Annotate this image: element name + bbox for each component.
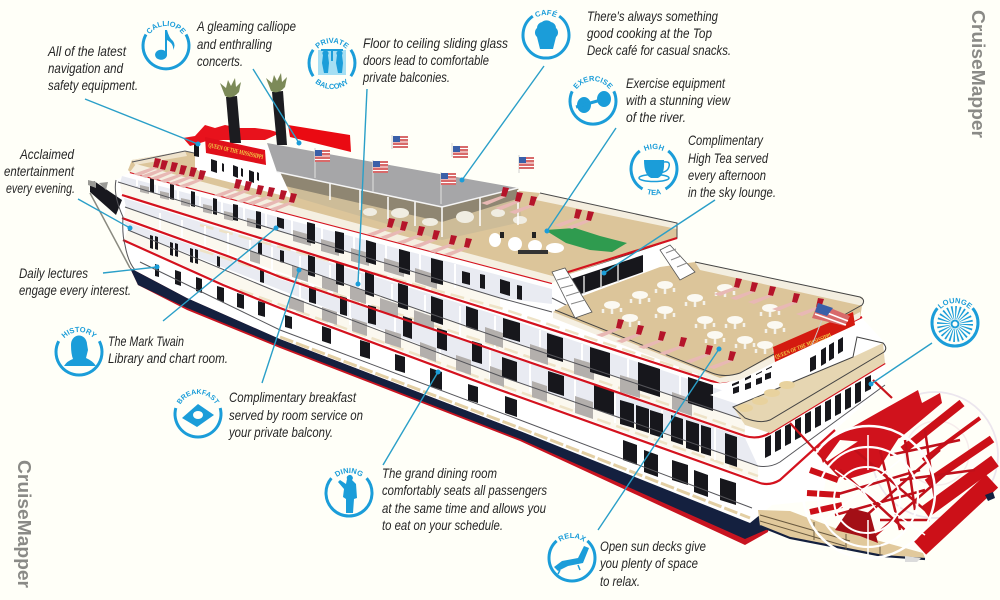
icon: cafe: CAFÉ	[535, 10, 558, 18]
icon: private balcony: PRIVATE	[315, 38, 350, 49]
lower aft deck	[733, 337, 886, 433]
main white body	[116, 172, 885, 523]
text: cafe: good cooking at the Top	[587, 25, 712, 41]
near wheel rings	[803, 426, 935, 560]
wheel hub support	[835, 508, 878, 543]
icon: cafe	[521, 10, 570, 60]
icon: lounge: LOUNGE	[938, 298, 972, 309]
icon: breakfast: BREAKFAST	[176, 389, 220, 404]
icon: calliope: CALLIOPE	[146, 20, 186, 34]
text: calliope: concerts.	[197, 53, 243, 69]
gangway at bow	[88, 180, 135, 270]
text: lectures: Daily lectures	[19, 265, 88, 281]
text: cafe: Deck café for casual snacks.	[587, 42, 731, 58]
text: breakfast: served by room service on	[229, 407, 363, 423]
text: high tea: in the sky lounge.	[688, 184, 776, 200]
icon: high tea: TEA	[648, 189, 662, 196]
aft banner: QUEEN OF THE MISSISSIPPI	[775, 333, 833, 361]
watermark: right: CruiseMapper	[968, 10, 988, 138]
stern deck	[553, 262, 864, 383]
text: dining: at the same time and allows you	[382, 500, 546, 516]
name board	[205, 137, 266, 165]
text: entertainment: Acclaimed	[19, 146, 75, 162]
stairs	[552, 245, 695, 318]
leader: lounge	[868, 343, 932, 386]
gallery columns	[137, 176, 715, 460]
deck lines	[118, 172, 885, 508]
aft cabin	[710, 327, 853, 405]
leader: cafe	[460, 66, 544, 182]
text: high tea: High Tea served	[688, 150, 769, 166]
text: breakfast: your private balcony.	[228, 424, 333, 440]
text: high tea: Complimentary	[688, 132, 764, 148]
icon: high tea: HIGH	[644, 144, 664, 151]
windows	[150, 178, 871, 505]
gallery walls	[120, 176, 758, 466]
text: exercise: with a stunning view	[626, 92, 731, 108]
text: lectures	[19, 265, 131, 298]
text: navigation: navigation and	[48, 60, 124, 76]
text: library	[108, 333, 228, 366]
text: breakfast: Complimentary breakfast	[229, 389, 357, 405]
rods	[790, 380, 892, 477]
text: cafe	[587, 8, 731, 58]
top deck	[128, 151, 677, 283]
balconies	[140, 185, 692, 419]
aft flag	[812, 303, 850, 345]
far wheel ring	[872, 392, 998, 518]
text: exercise: Exercise equipment	[626, 75, 726, 91]
text: dining	[382, 465, 547, 533]
leader: navigation	[85, 99, 200, 146]
text: high tea: every afternoon	[688, 167, 766, 183]
red cresting	[183, 125, 280, 146]
forward white cabin	[194, 144, 292, 198]
paddle wheel	[758, 380, 998, 562]
text: navigation: All of the latest	[47, 43, 127, 59]
deck furniture under roof	[330, 182, 527, 237]
leader: dining	[383, 370, 440, 465]
stern platform	[758, 510, 925, 562]
icon: calliope	[142, 20, 190, 70]
icon: dining: DINING	[334, 468, 363, 477]
text: balcony: private balconies.	[362, 69, 450, 85]
red rear panel	[288, 125, 351, 152]
text: calliope	[196, 18, 296, 69]
icon: private balcony: BALCONY	[315, 78, 348, 90]
icon: relax: RELAX	[558, 533, 586, 542]
text: cafe: There's always something	[587, 8, 718, 24]
icon: history	[54, 326, 104, 376]
text: exercise: of the river.	[626, 109, 686, 125]
text: breakfast	[228, 389, 363, 440]
text: dining: to eat on your schedule.	[382, 517, 503, 533]
text: lectures: engage every interest.	[19, 282, 131, 298]
text: entertainment	[4, 146, 75, 196]
leader: library	[163, 226, 278, 321]
leader: balcony	[356, 89, 367, 286]
aft banner	[773, 312, 855, 362]
leader: high tea	[602, 200, 715, 276]
text: library: Library and chart room.	[108, 350, 228, 366]
railing deck strips	[200, 225, 758, 476]
icon: exercise	[568, 76, 618, 126]
watermark: left: CruiseMapper	[14, 460, 34, 588]
red paddle blades	[807, 390, 995, 548]
icon: private balcony	[308, 38, 356, 90]
leader: relax	[598, 346, 722, 530]
text: high tea	[688, 132, 776, 200]
icon: relax	[548, 533, 596, 582]
text: calliope: A gleaming calliope	[196, 18, 296, 34]
leader: lectures	[103, 264, 160, 273]
railing bands	[120, 183, 758, 480]
riverboat illustration	[88, 73, 998, 562]
text: relax: to relax.	[600, 573, 640, 589]
text: balcony: doors lead to comfortable	[363, 52, 489, 68]
hull	[130, 268, 770, 545]
text: relax: Open sun decks give	[600, 538, 706, 554]
smokestack right	[266, 73, 287, 145]
text: relax	[599, 538, 706, 589]
top deck lounge chairs	[133, 158, 594, 256]
icon: high tea	[630, 144, 678, 196]
sky lounge	[560, 238, 677, 297]
text: dining: comfortably seats all passengers	[382, 482, 547, 498]
icon: dining	[324, 468, 374, 518]
putting green	[545, 228, 627, 252]
name board: QUEEN OF THE MISSISSIPPI	[208, 142, 264, 161]
text: dining: The grand dining room	[382, 465, 497, 481]
stern deck tables	[603, 281, 784, 354]
text: entertainment: every evening.	[6, 180, 75, 196]
text: navigation: safety equipment.	[48, 77, 138, 93]
icon: history: HISTORY	[61, 326, 97, 338]
shaded area beneath roof	[277, 172, 522, 240]
text: calliope: and enthralling	[197, 36, 272, 52]
text: relax: you plenty of space	[599, 555, 698, 571]
smokestack left	[220, 78, 241, 143]
leader: entertainment	[78, 199, 132, 230]
beige hull stripe	[280, 337, 750, 518]
text: library: The Mark Twain	[108, 333, 184, 349]
leader: breakfast	[262, 268, 302, 383]
gym equipment	[489, 232, 564, 254]
icon: exercise: EXERCISE	[573, 76, 613, 90]
text: exercise	[626, 75, 731, 125]
leader: exercise	[544, 128, 616, 234]
gray canopy roof	[267, 143, 518, 207]
text: balcony	[362, 35, 508, 85]
icon: breakfast	[174, 389, 222, 438]
text: balcony: Floor to ceiling sliding glass	[363, 35, 508, 51]
flags	[315, 135, 534, 204]
leader: calliope	[253, 69, 302, 146]
text: navigation	[47, 43, 138, 93]
icon: lounge	[930, 298, 980, 348]
stern deck chairs	[596, 278, 824, 369]
text: entertainment: entertainment	[4, 163, 75, 179]
